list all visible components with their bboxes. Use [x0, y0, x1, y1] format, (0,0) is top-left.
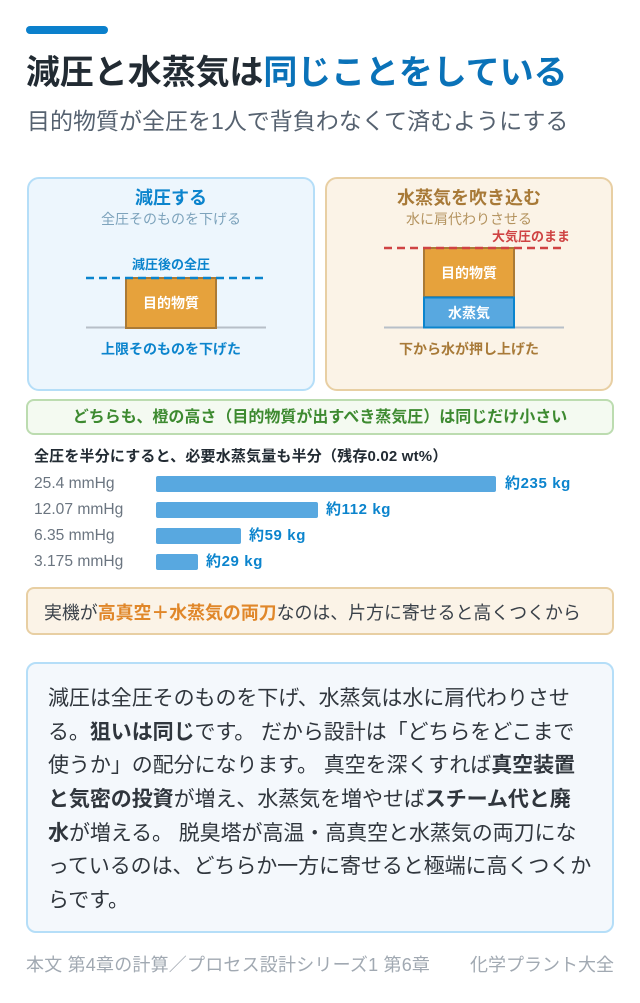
row: 25.4 mmHg: 約235 kg: [505, 475, 571, 492]
row: 6.35 mmHg: 約59 kg: [249, 527, 306, 544]
accent bar: [26, 26, 108, 34]
row: 12.07 mmHg: 12.07 mmHg: [34, 501, 123, 518]
chart title: 全圧を半分にすると、必要水蒸気量も半分（残存0.02 wt%）: [34, 448, 448, 465]
panel caption: 下から水が押し上げた: [399, 341, 539, 357]
panel caption: 上限そのものを下げた: [101, 341, 241, 357]
explanation text: らです。: [48, 889, 129, 912]
diagram: atmospheric pressure with steam: [384, 229, 570, 328]
orange callout: [26, 587, 614, 635]
title: 減圧と水蒸気は同じことをしている: [26, 54, 567, 92]
panel heading: 減圧する: [135, 188, 207, 208]
subtitle: 目的物質が全圧を1人で背負わなくて済むようにする: [27, 108, 568, 134]
explanation text: 減圧は全圧そのものを下げ、水蒸気は水に肩代わりさせ: [48, 687, 570, 710]
row: 3.175 mmHg: 3.175 mmHg: [34, 553, 123, 570]
note text: どちらも、橙の高さ（目的物質が出すべき蒸気圧）は同じだけ小さい: [73, 409, 567, 426]
explanation text: っているのは、どちらか一方に寄せると極端に高くつくか: [48, 855, 591, 878]
diagram: atmospheric pressure with steam: 水蒸気: [448, 305, 490, 321]
row: 25.4 mmHg: 25.4 mmHg: [34, 475, 115, 492]
panel heading: 水蒸気を吹き込む: [397, 188, 541, 208]
diagram: total pressure after reduction: [86, 257, 266, 329]
callout text: 実機が高真空＋水蒸気の両刀なのは、片方に寄せると高くつくから: [44, 603, 581, 623]
explanation text: 使うか」の配分になります。 真空を深くすれば真空装置: [48, 754, 575, 777]
explanation panel: [26, 662, 614, 933]
panel subheading: 水に肩代わりさせる: [406, 211, 532, 227]
diagram: total pressure after reduction: 目的物質: [143, 295, 199, 311]
diagram: atmospheric pressure with steam: 目的物質: [441, 265, 497, 281]
diagram: atmospheric pressure with steam: 大気圧のまま: [492, 229, 570, 244]
explanation text: [48, 687, 591, 912]
explanation text: 水が増える。 脱臭塔が高温・高真空と水蒸気の両刀にな: [48, 822, 576, 845]
panel subheading: 全圧そのものを下げる: [101, 211, 241, 227]
footer brand: 化学プラント大全: [470, 955, 614, 975]
row: 25.4 mmHg: [34, 475, 571, 492]
row: 3.175 mmHg: [34, 553, 263, 570]
row: 12.07 mmHg: 約112 kg: [326, 501, 391, 518]
panel: reduced pressure: [27, 177, 315, 391]
explanation text: る。狙いは同じです。 だから設計は「どちらをどこまで: [48, 721, 574, 744]
footer source: 本文 第4章の計算／プロセス設計シリーズ1 第6章: [26, 955, 430, 975]
row: 6.35 mmHg: 6.35 mmHg: [34, 527, 115, 544]
bar chart: [34, 448, 571, 570]
green note: [26, 399, 614, 435]
row: 6.35 mmHg: [34, 527, 306, 544]
panel: steam injection: [325, 177, 613, 391]
diagram: total pressure after reduction: 減圧後の全圧: [132, 257, 210, 272]
row: 12.07 mmHg: [34, 501, 391, 518]
explanation text: と気密の投資が増え、水蒸気を増やせばスチーム代と廃: [48, 788, 571, 811]
row: 3.175 mmHg: 約29 kg: [206, 553, 263, 570]
